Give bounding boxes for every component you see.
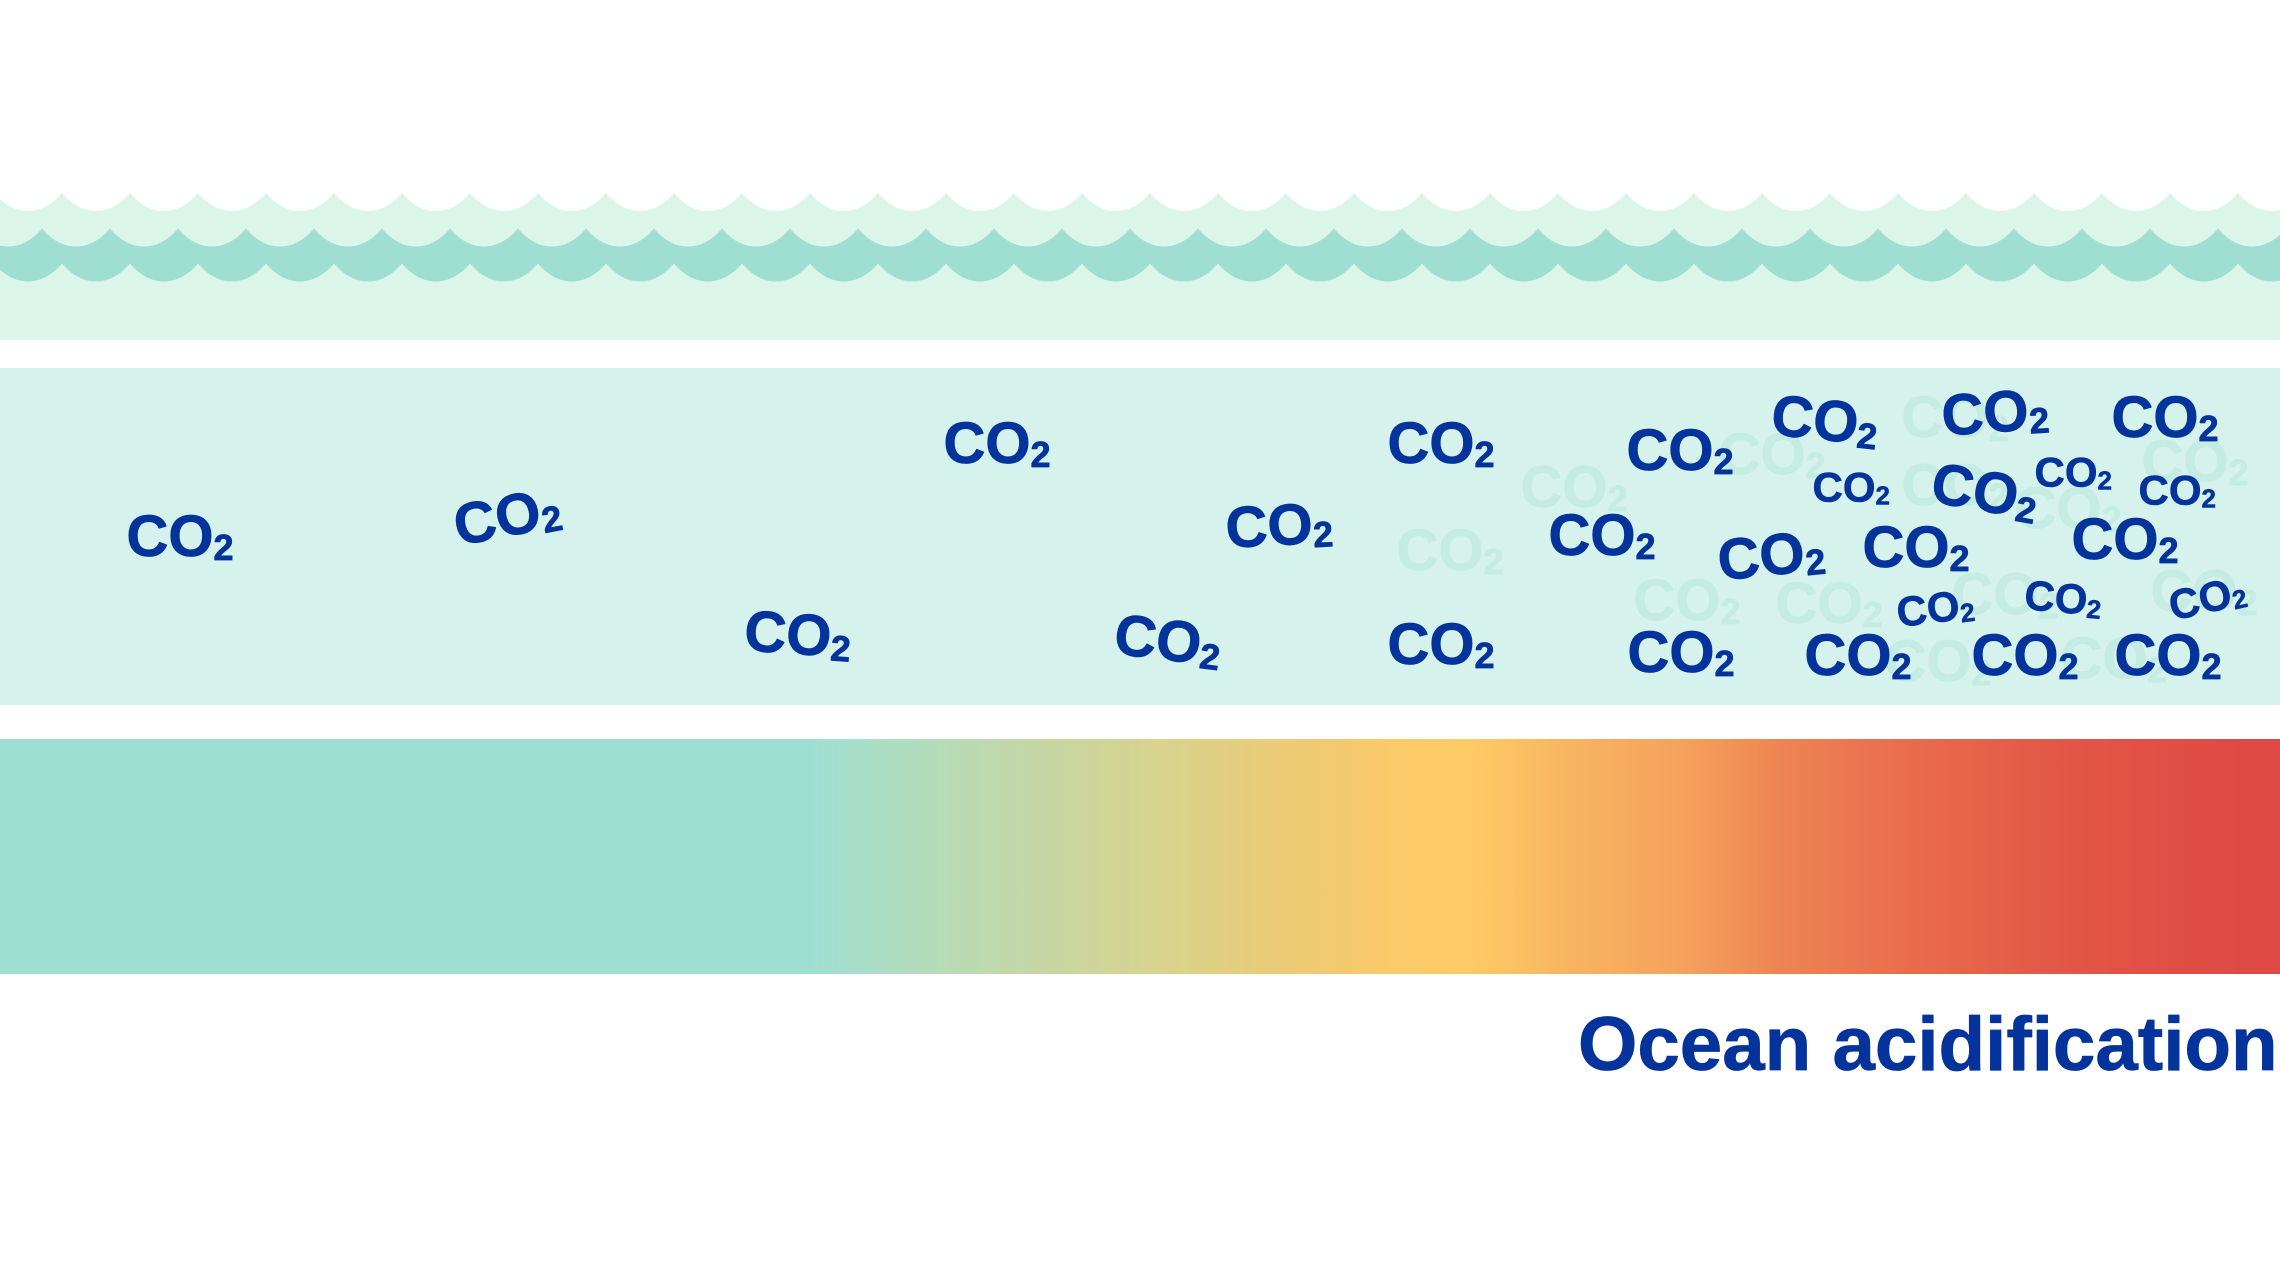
acidity gradient bar — [0, 739, 2280, 974]
dark CO2 molecules: 2 — [214, 527, 234, 568]
faint CO2 molecules: CO — [1634, 568, 1720, 633]
dark CO2 molecules: CO — [1628, 620, 1714, 685]
dark CO2 molecules: 2 — [1030, 434, 1051, 475]
teal wave stripe — [0, 228, 2280, 282]
dark CO2 molecules: CO — [1548, 503, 1636, 568]
dark CO2 molecules: 2 — [1474, 635, 1495, 676]
dark CO2 molecules: CO — [126, 504, 214, 569]
dark CO2 molecules: CO — [944, 411, 1030, 476]
dark CO2 molecules: 2 — [1197, 635, 1222, 678]
dark CO2 molecules: CO — [1862, 515, 1950, 580]
dark CO2 molecules: 2 — [829, 627, 852, 670]
faint CO2 molecules: CO — [1902, 453, 1988, 518]
dark CO2 molecules: CO — [1768, 383, 1862, 456]
water band background — [0, 368, 2280, 705]
faint CO2 molecules: CO — [1520, 455, 1608, 520]
dark CO2 molecules: CO — [1714, 520, 1808, 593]
faint CO2 molecules: 2 — [2102, 499, 2122, 540]
dark CO2 molecules: CO — [1927, 450, 2024, 529]
dark CO2 molecules: CO — [2072, 507, 2158, 572]
dark CO2 molecules: CO — [2023, 571, 2089, 624]
dark CO2 molecules: CO — [2034, 448, 2098, 496]
dark CO2 molecules: 2 — [2198, 408, 2219, 449]
dark CO2 molecules: CO — [742, 598, 834, 669]
faint CO2 molecules: 2 — [1806, 445, 1826, 486]
dark CO2 molecules: 2 — [538, 497, 566, 541]
dark CO2 molecules: 2 — [1959, 597, 1977, 628]
dark CO2 molecules: CO — [1894, 582, 1962, 636]
dark CO2 molecules: 2 — [2028, 399, 2051, 442]
faint CO2 molecules: 2 — [1988, 408, 2009, 449]
dark CO2 molecules: CO — [1939, 378, 2031, 449]
dark CO2 molecules: 2 — [2098, 466, 2112, 496]
dark CO2 molecules: 2 — [1714, 441, 1734, 482]
faint CO2 molecules: 2 — [1972, 652, 1992, 693]
faint CO2 molecules: 2 — [2038, 585, 2059, 626]
faint CO2 molecules: CO — [2014, 476, 2102, 541]
faint CO2 molecules: CO — [1776, 571, 1862, 636]
dark CO2 molecules — [126, 376, 2250, 688]
faint CO2 molecules: 2 — [1988, 476, 2009, 517]
dark CO2 molecules: CO — [2164, 570, 2236, 630]
dark CO2 molecules: 2 — [1950, 538, 1970, 579]
faint CO2 molecules: 2 — [1608, 478, 1628, 519]
dark CO2 molecules: CO — [1812, 464, 1876, 510]
dark CO2 molecules: CO — [1388, 612, 1474, 677]
faint CO2 molecules: 2 — [1484, 541, 1504, 582]
dark CO2 molecules: 2 — [1892, 646, 1912, 687]
dark CO2 molecules: 2 — [2058, 646, 2079, 687]
dark CO2 molecules: 2 — [2202, 646, 2222, 687]
faint CO2 molecules: CO — [2150, 559, 2238, 624]
faint CO2 molecules — [1396, 385, 2258, 694]
dark CO2 molecules: 2 — [2202, 484, 2216, 514]
dark CO2 molecules: CO — [1224, 491, 1314, 561]
dark CO2 molecules: CO — [2112, 385, 2198, 450]
faint CO2 molecules: CO — [1902, 385, 1988, 450]
faint CO2 molecules: CO — [1396, 518, 1484, 583]
dark CO2 molecules: CO — [448, 478, 546, 559]
label: Ocean acidification: Ocean acidification — [1578, 1002, 2278, 1087]
faint CO2 molecules: 2 — [2238, 582, 2258, 623]
dark CO2 molecules: 2 — [2085, 594, 2102, 625]
dark CO2 molecules: CO — [1388, 411, 1474, 476]
dark CO2 molecules: 2 — [1876, 480, 1890, 510]
faint CO2 molecules: CO — [1884, 629, 1972, 694]
panel: CO2 water band — [0, 368, 2280, 705]
dark CO2 molecules: 2 — [1474, 434, 1495, 475]
dark CO2 molecules: CO — [1972, 623, 2058, 688]
faint CO2 molecules: CO — [1718, 422, 1806, 487]
dark CO2 molecules: 2 — [1803, 540, 1828, 583]
dark CO2 molecules: 2 — [1714, 643, 1735, 684]
faint CO2 molecules: 2 — [1720, 591, 1741, 632]
dark CO2 molecules: CO — [2114, 623, 2202, 688]
dark CO2 molecules: CO — [1626, 418, 1714, 483]
faint CO2 molecules: CO — [2060, 626, 2148, 691]
faint CO2 molecules: CO — [1952, 562, 2038, 627]
faint CO2 molecules: CO — [2142, 429, 2228, 494]
dark CO2 molecules: 2 — [2158, 530, 2179, 571]
dark CO2 molecules: 2 — [1855, 415, 1879, 457]
faint CO2 molecules: 2 — [2228, 452, 2249, 493]
dark CO2 molecules: CO — [1804, 623, 1892, 688]
faint CO2 molecules: 2 — [1862, 594, 1883, 635]
dark CO2 molecules: CO — [2138, 466, 2202, 514]
dark CO2 molecules: 2 — [1636, 526, 1656, 567]
faint CO2 molecules: 2 — [2148, 649, 2168, 690]
panel: ocean surface waves — [0, 193, 2280, 340]
dark CO2 molecules: 2 — [2012, 488, 2039, 532]
pale sea band with scalloped top — [0, 193, 2280, 340]
dark CO2 molecules: CO — [1111, 602, 1205, 677]
dark CO2 molecules: 2 — [1312, 513, 1334, 555]
dark CO2 molecules: 2 — [2229, 583, 2250, 615]
